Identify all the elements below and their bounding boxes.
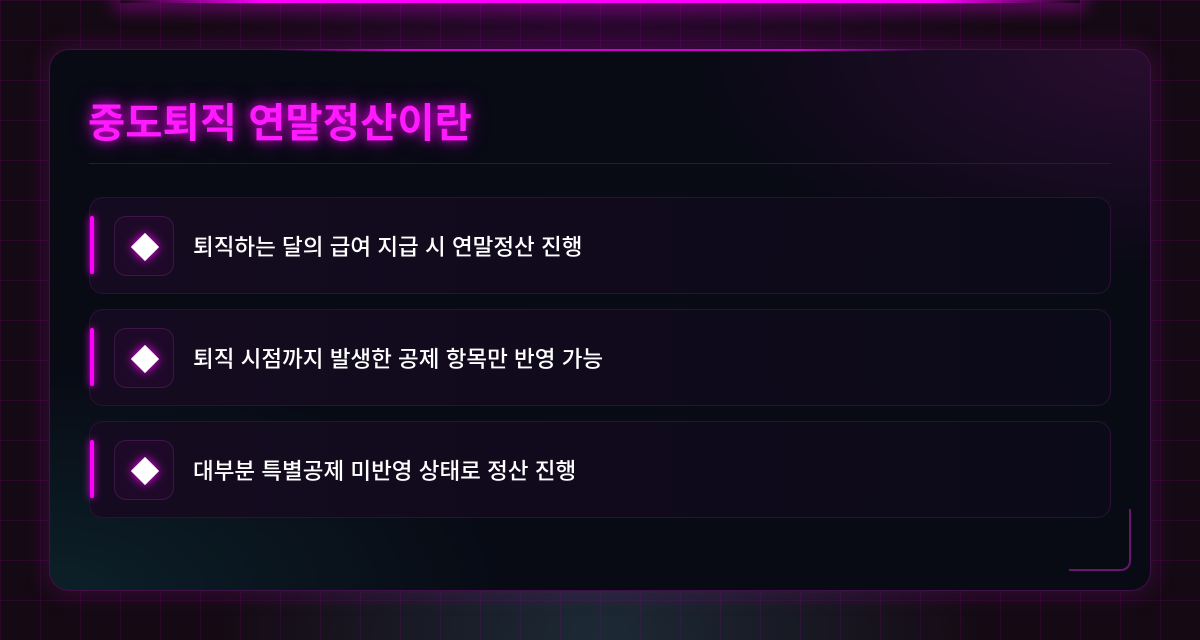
corner bracket: [1069, 509, 1131, 571]
panel: main card: [49, 49, 1151, 591]
text 3: 대부분 특별공제 미반영 상태로 정산 진행: [193, 459, 576, 484]
item 2: [89, 309, 1111, 406]
accent bar: [90, 216, 94, 274]
accent bar: [90, 440, 94, 498]
title: 중도퇴직 연말정산이란: [88, 100, 472, 146]
icon: diamond: [114, 440, 174, 500]
accent bar: [90, 328, 94, 386]
item 3: [89, 421, 1111, 518]
icon: diamond: [114, 216, 174, 276]
icon: diamond: [114, 328, 174, 388]
item 1: [89, 197, 1111, 294]
top glow bar: [120, 0, 1080, 3]
text 1: 퇴직하는 달의 급여 지급 시 연말정산 진행: [193, 235, 582, 260]
text 2: 퇴직 시점까지 발생한 공제 항목만 반영 가능: [193, 347, 603, 372]
